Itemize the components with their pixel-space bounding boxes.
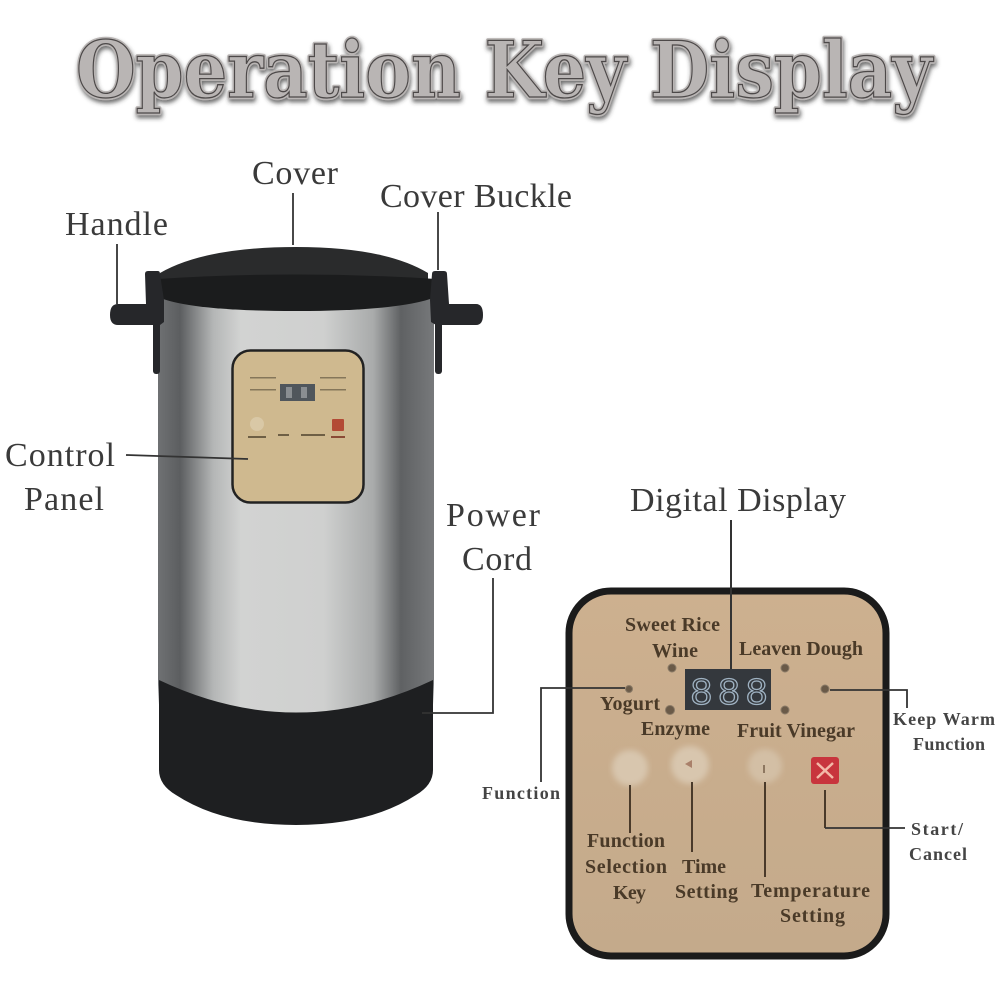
- external leader lines: [541, 520, 907, 828]
- key labels: Key: [613, 882, 646, 904]
- label: handle: Handle: [65, 206, 168, 243]
- start cancel key: [811, 757, 839, 784]
- label: cover: Cover: [252, 155, 339, 192]
- temperature key: [748, 749, 782, 783]
- left handle: [110, 271, 164, 374]
- label: control panel: [5, 437, 115, 518]
- key labels: Time: [682, 856, 726, 878]
- label: control panel: Panel: [24, 481, 104, 518]
- label: start cancel: Cancel: [909, 844, 967, 864]
- label: keep warm function: Function: [913, 734, 985, 754]
- key labels: Selection: [585, 856, 667, 878]
- small control panel: [232, 350, 364, 502]
- lid band: [158, 274, 436, 311]
- label: cover buckle: Cover Buckle: [380, 178, 572, 215]
- function key: [612, 750, 648, 786]
- key labels: Function: [587, 830, 665, 852]
- label: keep warm function: Keep Warm: [893, 709, 995, 729]
- key leader lines: [630, 782, 825, 877]
- mode labels: Wine: [652, 640, 698, 662]
- leader lines: pot: [117, 193, 493, 713]
- label: start cancel: Start/: [911, 819, 964, 839]
- pot body: [158, 296, 434, 725]
- label: power cord: Cord: [462, 541, 532, 578]
- mode labels: Fruit Vinegar: [737, 720, 855, 742]
- small buttons: [250, 417, 264, 431]
- mode labels: Enzyme: [641, 718, 710, 740]
- label: digital display: Digital Display: [630, 482, 846, 519]
- pot base: [159, 680, 433, 825]
- mode labels: Yogurt: [600, 693, 660, 715]
- label: power cord: [446, 497, 541, 578]
- mode labels: Sweet Rice: [625, 614, 720, 636]
- time key: [671, 746, 709, 784]
- key labels: Setting: [780, 905, 845, 927]
- key labels: Setting: [675, 881, 738, 903]
- mode labels: [600, 614, 863, 742]
- mode labels: Leaven Dough: [739, 638, 863, 660]
- label: power cord: Power: [446, 497, 541, 534]
- indicator dots: [626, 664, 829, 714]
- key labels: Temperature: [751, 880, 870, 902]
- large control panel: [569, 591, 886, 956]
- digital display readout: 888: [690, 673, 768, 716]
- label: keep warm function: [893, 709, 995, 754]
- label: function: Function: [482, 783, 560, 803]
- pot lid: [160, 247, 428, 282]
- key labels: [585, 830, 870, 927]
- label: control panel: Control: [5, 437, 115, 474]
- pot illustration: [110, 247, 483, 825]
- label: start cancel: [909, 819, 967, 864]
- small display: [280, 384, 315, 401]
- right handle: [430, 271, 483, 374]
